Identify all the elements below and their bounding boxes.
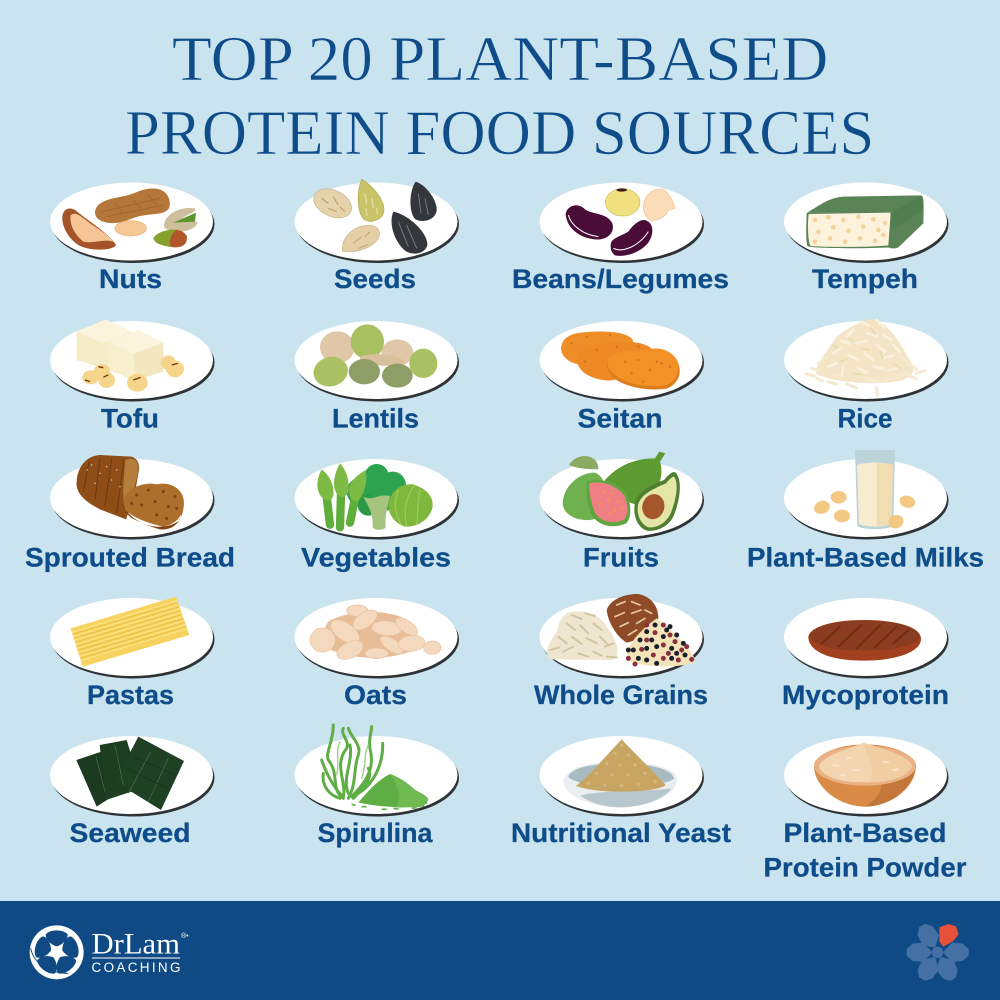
label: Vegetables [301,542,451,572]
label: Tempeh [812,264,918,294]
plate [50,321,214,402]
icon: tempeh [806,195,924,248]
panel: Tofu [50,319,214,434]
icon: vegetables [317,463,433,530]
plate [784,598,948,678]
plate [50,598,214,678]
panel: Nutritional Yeast [511,736,731,848]
icon: nutritional yeast bowl [563,739,677,807]
panel: Tempeh [784,182,948,294]
icon: rice [806,319,925,396]
panel: Fruits [540,452,704,572]
label: Rice [838,404,892,434]
icon: oats [310,605,441,663]
panel: Rice [784,319,948,434]
wordmark: DrLam [92,928,180,960]
icon: milk glass and soybeans [812,450,917,531]
panel: Oats [294,598,459,710]
panel: Mycoprotein [782,598,949,710]
label: Seeds [334,264,416,294]
plate [294,598,459,678]
panel: Seeds [294,179,459,294]
plate [784,736,948,816]
label: Whole Grains [534,680,708,710]
title [125,23,874,168]
panel: Beans/Legumes [512,182,729,294]
icon: pasta [71,597,189,667]
label: Nutritional Yeast [511,818,731,848]
panel: Lentils [294,321,459,434]
label: Sprouted Bread [25,542,235,572]
icon: logo flower [30,925,84,979]
icon: flower emblem [908,922,968,983]
icon: fruits [563,452,680,531]
label: Lentils [332,404,419,434]
icon: beans [566,188,675,256]
plate [294,182,459,263]
panel: Plant-Based Protein Powder [764,736,967,882]
panel: Seaweed [50,736,214,848]
panel: Whole Grains [534,594,708,710]
icon: whole grains [547,594,695,666]
logo: DrLam Coaching [30,925,189,979]
label: Protein Powder [764,852,967,882]
plate [294,321,459,402]
logo: DrLam Coaching: ®• [181,932,189,940]
icon: nuts [62,189,197,250]
title: PROTEIN FOOD SOURCES [125,97,874,168]
footer band [0,901,1000,1000]
label: Pastas [87,680,174,710]
label: Beans/Legumes [512,264,729,294]
plate [50,459,214,540]
plate [540,598,704,678]
label [764,818,967,882]
icon: seitan [561,331,680,390]
label: Tofu [101,404,159,434]
panel: Nuts [50,182,214,294]
plate [294,459,459,540]
plate [540,321,704,402]
label: Plant-Based Milks [747,542,984,572]
icon: lentils [310,324,437,390]
plate [540,736,704,816]
title: TOP 20 PLANT-BASED [172,23,828,94]
icon: tofu [77,319,184,392]
panel: Sprouted Bread [25,455,235,572]
panel: Pastas [50,597,214,710]
plate [50,182,214,263]
plate [540,459,704,540]
label: Plant-Based [784,818,946,848]
logo: DrLam Coaching: COACHING [92,960,180,975]
label: Nuts [99,264,162,294]
label: Fruits [583,542,659,572]
icon: bread [77,455,184,529]
plate [294,736,459,816]
label: Mycoprotein [782,680,949,710]
icon: spirulina [322,725,428,809]
plate [784,459,948,540]
icon: protein powder bowl [814,743,916,807]
panel: Spirulina [294,725,459,848]
label: Seaweed [70,818,190,848]
plate [50,736,214,816]
label: Spirulina [318,818,433,848]
icon: mycoprotein patty [808,620,921,661]
plate [540,182,704,263]
label: Oats [344,680,407,710]
panel: Seitan [540,321,704,434]
label: Seitan [578,404,662,434]
panel: Vegetables [294,459,459,572]
plate [784,321,948,402]
icon: seeds [309,179,437,254]
plate [784,182,948,263]
panel: Plant-Based Milks [747,450,984,572]
icon: seaweed sheets [76,737,184,810]
